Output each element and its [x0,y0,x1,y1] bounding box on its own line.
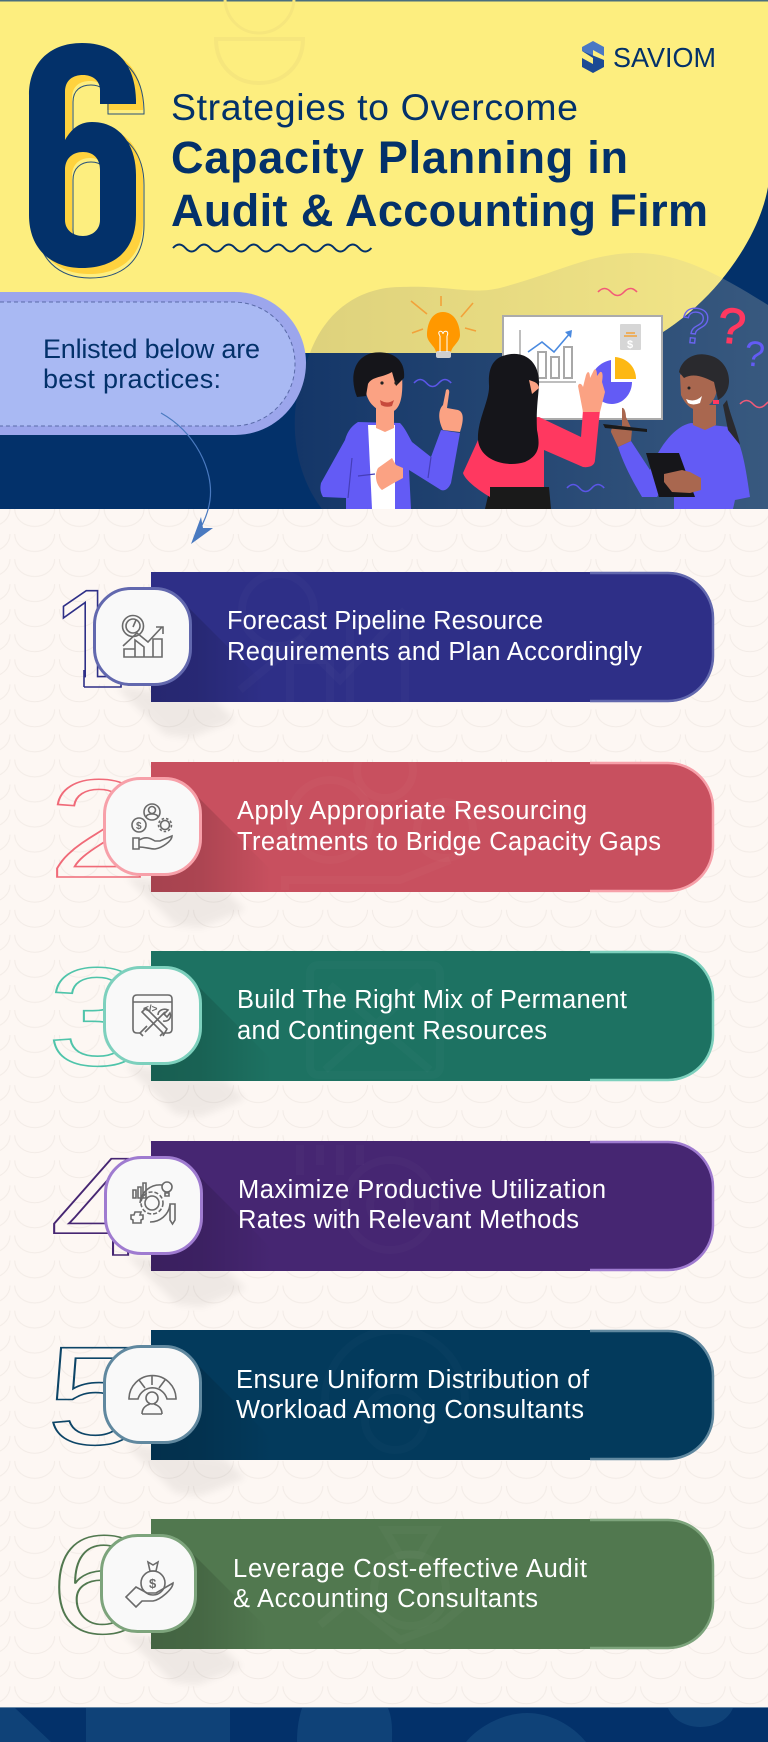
title: Audit & Accounting Firm [171,185,708,236]
panel: strategy 1 [50,560,714,738]
text: Treatments to Bridge Capacity Gaps [237,828,661,856]
question marks: ? [715,297,749,355]
panel: strategy 5 [46,1317,714,1496]
icon card [104,778,200,874]
icon card [104,968,200,1064]
title: Strategies to Overcome [171,86,578,128]
text: and Contingent Resources [237,1017,547,1045]
text: Workload Among Consultants [236,1396,584,1424]
icon card [102,1536,196,1632]
icon: light bulb [411,296,476,358]
text: Leverage Cost-effective Audit [233,1555,587,1583]
icon card [106,1158,202,1254]
panel: strategy 6 [50,1506,714,1685]
bar [151,1141,714,1271]
icon card: </> [143,1004,158,1015]
callout pill: enlisted below [0,292,306,435]
whiteboard chart: $ [627,339,633,351]
illustration: team at whiteboard [320,288,768,509]
callout pill: enlisted below: Enlisted below are [43,334,260,364]
icon card [104,1346,200,1442]
bar [151,742,714,892]
icon card [94,588,190,684]
question marks: ? [678,297,712,355]
numeral 2: 2 [48,750,149,907]
icon card: $ [136,821,142,832]
text: Rates with Relevant Methods [238,1206,579,1234]
text: Requirements and Plan Accordingly [227,638,642,666]
text: Maximize Productive Utilization [238,1176,606,1204]
panel: strategy 2 [48,742,714,928]
squiggles [414,288,768,492]
person: man [320,352,463,509]
text [233,1555,587,1613]
bar [151,1330,714,1460]
text: Ensure Uniform Distribution of [236,1366,590,1394]
person: woman at board [463,354,605,509]
question marks [683,308,764,366]
text: & Accounting Consultants [233,1585,538,1613]
title [171,86,708,236]
arrow from callout [161,413,213,544]
header background [0,0,768,509]
question marks: ? [743,332,767,375]
panel: strategy 4 [50,1128,714,1307]
text [237,986,627,1045]
numeral 3: 3 [47,938,148,1095]
title: Capacity Planning in [171,132,628,183]
text [238,1176,606,1234]
text [227,607,642,666]
bar [151,1519,714,1649]
numeral 4: 4 [50,1128,151,1285]
numeral 1: 1 [50,560,128,717]
page background with scale pattern [0,509,768,1707]
text: Forecast Pipeline Resource [227,607,543,635]
text [237,797,661,856]
numeral 6: 6 [50,1506,151,1663]
big numeral 6 [29,43,144,278]
callout pill: enlisted below: best practices: [43,364,221,394]
title underline squiggle [173,244,371,252]
person: woman with tablet [603,354,750,509]
footer band [0,1707,768,1742]
panel: strategy 3 [47,938,714,1117]
text [236,1366,590,1424]
numeral 5: 5 [46,1317,147,1474]
text: Build The Right Mix of Permanent [237,986,627,1014]
icon card: $ [149,1576,157,1591]
whiteboard chart [503,316,662,419]
bar [151,951,714,1081]
logo: Saviom: SAVIOM [613,42,716,73]
bar [151,572,714,702]
text: Apply Appropriate Resourcing [237,797,587,825]
